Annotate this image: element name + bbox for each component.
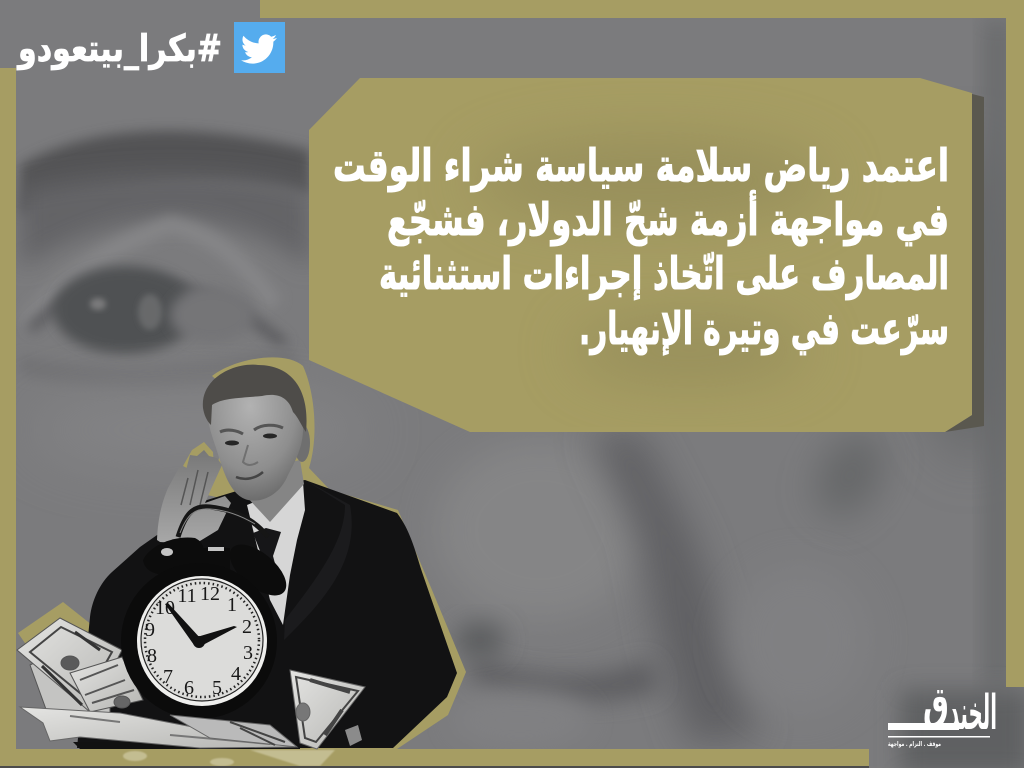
clock numbers: 1 <box>227 594 237 616</box>
clock numbers <box>145 583 253 699</box>
clock handle <box>178 507 268 537</box>
clock numbers: 8 <box>147 645 157 667</box>
clock bells <box>143 535 295 605</box>
clock numbers: 2 <box>242 616 252 638</box>
eye <box>30 283 285 345</box>
raised hand <box>157 442 231 544</box>
clock numbers: 6 <box>184 677 194 699</box>
panel: text callout with shadow <box>309 78 984 432</box>
clock numbers: 11 <box>177 585 197 607</box>
tie <box>253 528 282 592</box>
clock numbers: 12 <box>200 583 220 605</box>
clock numbers: 3 <box>243 642 253 664</box>
clock numbers: 5 <box>212 677 222 699</box>
neck <box>235 460 304 522</box>
banknotes: back stack <box>17 618 143 720</box>
clock numbers: 7 <box>163 666 173 688</box>
suit lapel <box>284 480 352 640</box>
wrist and watch <box>345 725 362 746</box>
clock numbers: 9 <box>145 619 155 641</box>
brow <box>20 131 310 215</box>
clock numbers: 10 <box>155 597 175 619</box>
main text block <box>333 139 949 355</box>
hashtag and twitter badge <box>16 22 285 73</box>
banknotes: front <box>20 670 365 749</box>
gold cut-out outline <box>207 357 466 749</box>
dark strip under money <box>73 742 300 749</box>
suit <box>77 480 457 748</box>
money reflected in bottom gold strip <box>123 750 335 766</box>
logo: Al-Khandaq: ق <box>923 676 949 730</box>
figure: man with alarm clock and banknotes <box>0 357 869 768</box>
clock numbers: 4 <box>231 663 241 685</box>
shirt and collar <box>247 482 305 625</box>
logo: Al-Khandaq <box>888 676 997 748</box>
hashtag text: #بكرا_بيتعودو <box>16 27 222 70</box>
logo tagline: موقف . التزام . مواجهة <box>888 740 941 748</box>
top of cheek and nose area <box>920 140 1020 460</box>
gold tip behind banknotes <box>18 602 92 665</box>
clock <box>121 563 277 719</box>
head <box>203 365 310 501</box>
icon: twitter bird <box>234 22 285 73</box>
clock hands <box>165 603 237 648</box>
